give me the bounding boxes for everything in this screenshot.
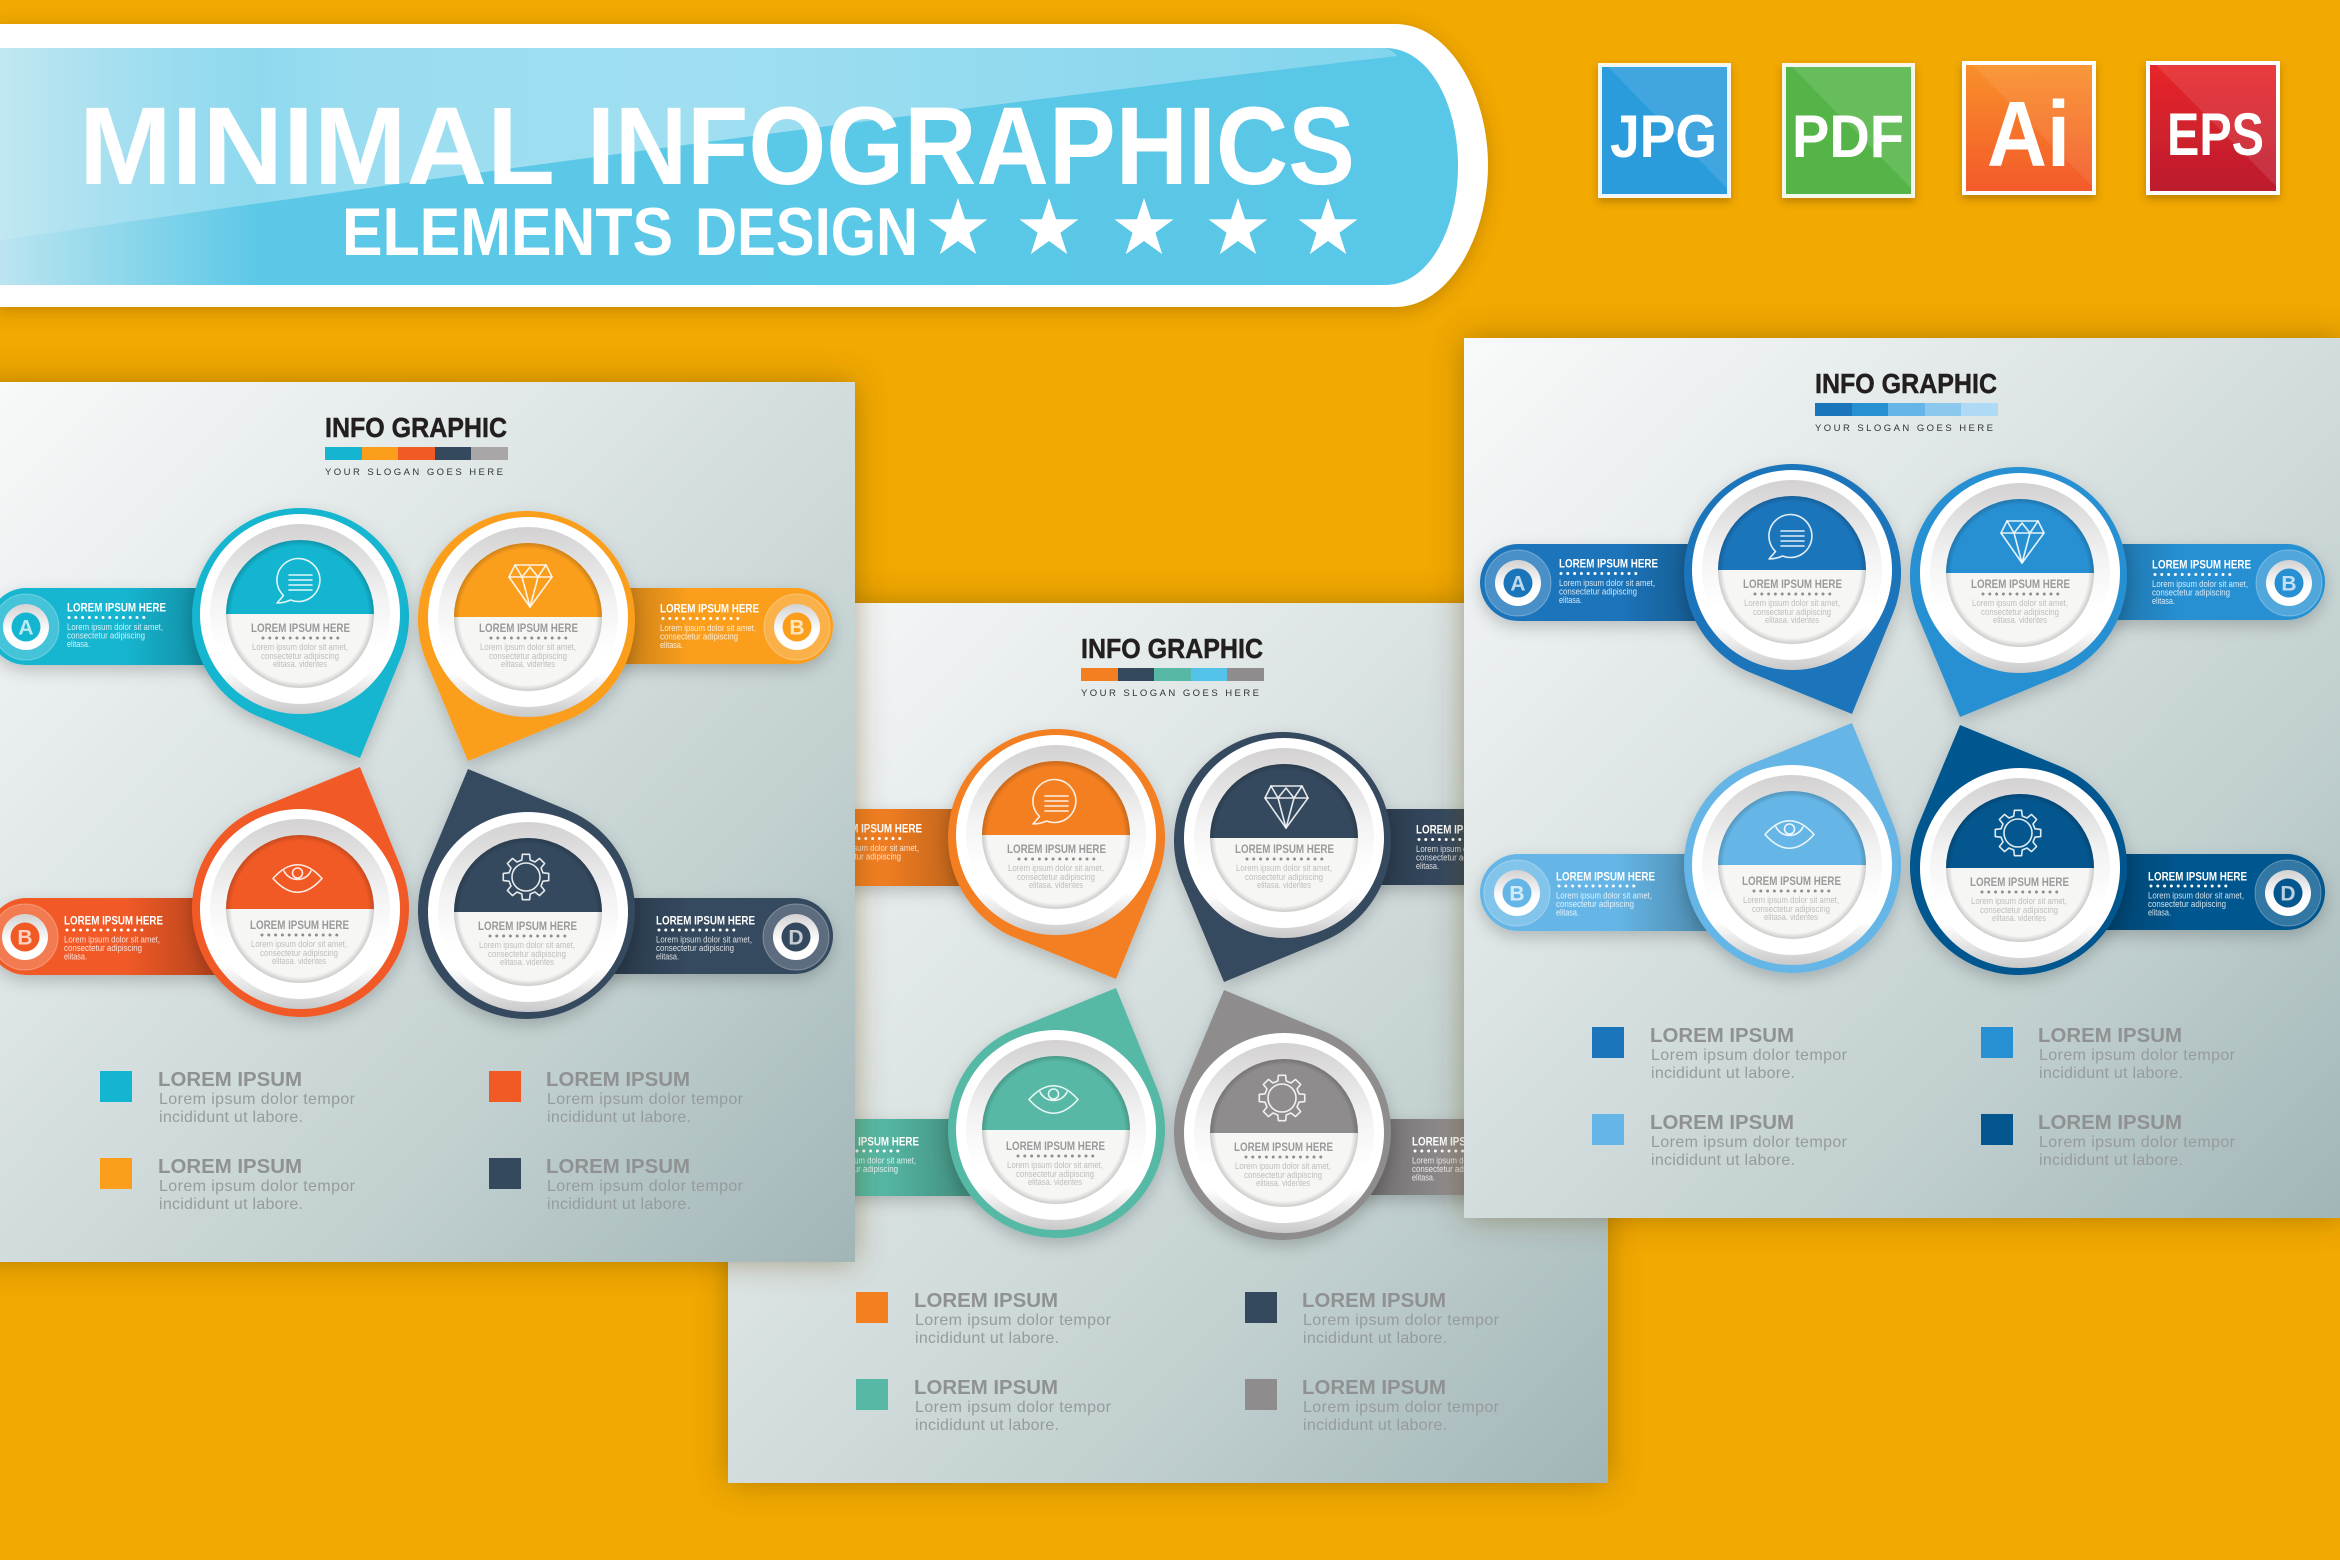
pin text: LOREM IPSUM HERE (251, 621, 350, 635)
pin (192, 508, 409, 758)
badge A (0, 594, 59, 660)
label bar: elitasa. (67, 639, 90, 649)
pin text (1006, 1139, 1105, 1187)
label bar: consectetur adipiscing (1416, 852, 1494, 862)
icon: Ai file badge (1964, 63, 2094, 193)
pin text: consectetur adipiscing (1753, 607, 1831, 617)
legend item: Lorem ipsum dolor tempor (2039, 1134, 2236, 1151)
icon: eye (273, 865, 322, 892)
badge B (2256, 550, 2322, 616)
node: bottom-right grey (1174, 990, 1589, 1240)
label bar: LOREM IPSUM HERE (67, 600, 166, 614)
label bar: LOREM IPSUM HERE (656, 914, 755, 928)
pin (1910, 467, 2127, 717)
label bar: LOREM IPSUM HERE (1556, 870, 1655, 884)
label bar: Lorem ipsum dolor sit amet, (64, 934, 160, 944)
subtitle: DESIGN (695, 194, 918, 270)
legend item: LOREM IPSUM (158, 1069, 302, 1091)
badge A (1485, 550, 1551, 616)
badge B: B (789, 616, 805, 640)
label bar: consectetur adipiscing (1556, 899, 1634, 909)
label bar (1284, 1119, 1589, 1195)
badge D (2255, 860, 2321, 926)
heading (1081, 633, 1264, 699)
heading: YOUR SLOGAN GOES HERE (325, 467, 503, 478)
icon: diamond (2001, 521, 2044, 563)
icon: speech bubble (277, 559, 320, 603)
subtitle (342, 194, 918, 270)
title banner (0, 24, 1488, 307)
panel: left infographic (0, 382, 855, 1262)
pin text: consectetur adipiscing (1244, 1170, 1322, 1180)
heading (325, 412, 508, 478)
label bar (528, 588, 833, 664)
node: bottom-right dark blue (1910, 725, 2325, 975)
pin text: Lorem ipsum dolor sit amet, (1235, 1161, 1331, 1171)
icon: JPG file badge: JPG (1610, 103, 1717, 170)
label bar: consectetur adipiscing (2148, 899, 2226, 909)
label bar: elitasa. (1556, 908, 1579, 918)
pin text: LOREM IPSUM HERE (1006, 1139, 1105, 1153)
label bar (0, 898, 300, 975)
pin text: consectetur adipiscing (1016, 1169, 1094, 1179)
badge B: B (17, 926, 33, 950)
pin text: elitasa. videntes (1257, 880, 1311, 890)
icon: gear (503, 854, 549, 900)
legend item: incididunt ut labore. (159, 1196, 303, 1213)
legend item: Lorem ipsum dolor tempor (547, 1178, 744, 1195)
badge D: D (2280, 882, 2296, 906)
icon: speech bubble (1033, 780, 1076, 824)
label bar: LOREM IPSUM HERE (2148, 870, 2247, 884)
pin text: LOREM IPSUM HERE (479, 621, 578, 635)
legend item: incididunt ut labore. (1651, 1065, 1795, 1082)
node: top-right navy (1174, 732, 1589, 982)
label bar: elitasa. (2148, 908, 2171, 918)
heading: YOUR SLOGAN GOES HERE (1815, 423, 1993, 434)
heading: INFO GRAPHIC (1815, 368, 1997, 399)
label bar: elitasa. (2152, 596, 2175, 606)
label bar: Lorem ipsum dolor sit amet, (1556, 890, 1652, 900)
label bar: LOREM IPSUM HERE (823, 822, 922, 836)
label bar (1480, 854, 1792, 931)
legend item: LOREM IPSUM (158, 1156, 302, 1178)
label bar: elitasa. (64, 952, 87, 962)
label bar: consectetur adipiscing (656, 943, 734, 953)
node: bottom-left light blue (1480, 723, 1901, 973)
label bar: elitasa. (820, 1172, 843, 1182)
pin text: consectetur adipiscing (260, 948, 338, 958)
icon: eye (1029, 1086, 1078, 1113)
legend item: incididunt ut labore. (915, 1417, 1059, 1434)
legend item: Lorem ipsum dolor tempor (547, 1091, 744, 1108)
icon: gear (1259, 1075, 1305, 1121)
pin text: Lorem ipsum dolor sit amet, (252, 642, 348, 652)
legend item: incididunt ut labore. (2039, 1065, 2183, 1082)
pin text: LOREM IPSUM HERE (1007, 842, 1106, 856)
label bar: Lorem ipsum dolor sit amet, (1559, 578, 1655, 588)
label bar: LOREM IPSUM HERE (660, 602, 759, 616)
pin (418, 511, 635, 761)
pin text: LOREM IPSUM HERE (1234, 1140, 1333, 1154)
legend item: Lorem ipsum dolor tempor (159, 1091, 356, 1108)
label bar: Lorem ipsum dolor sit amet, (823, 843, 919, 853)
legend item: incididunt ut labore. (2039, 1152, 2183, 1169)
heading: INFO GRAPHIC (1081, 633, 1263, 664)
main title (79, 85, 1355, 208)
pin text: consectetur adipiscing (1245, 872, 1323, 882)
legend item: Lorem ipsum dolor tempor (915, 1312, 1112, 1329)
node: top-left blue (1480, 464, 1901, 714)
pin text: elitasa. videntes (1992, 913, 2046, 923)
badge B (764, 594, 830, 660)
node: top-right orange (418, 511, 833, 761)
label bar: consectetur adipiscing (820, 1164, 898, 1174)
legend item: LOREM IPSUM (914, 1377, 1058, 1399)
label bar: elitasa. (1559, 595, 1582, 605)
pin text: LOREM IPSUM HERE (1743, 577, 1842, 591)
legend item: incididunt ut labore. (547, 1109, 691, 1126)
label bar: Lorem ipsum dolor sit amet, (660, 623, 756, 633)
pin (948, 729, 1165, 979)
main title: INFOGRAPHICS (587, 85, 1355, 208)
label bar: LOREM IPSUM HERE (64, 914, 163, 928)
badge B: B (1509, 882, 1525, 906)
legend item: Lorem ipsum dolor tempor (915, 1399, 1112, 1416)
legend item: Lorem ipsum dolor tempor (1303, 1399, 1500, 1416)
node: top-left orange (744, 729, 1165, 979)
pin text: consectetur adipiscing (1017, 872, 1095, 882)
panel: right infographic (1464, 338, 2340, 1218)
legend item (1981, 1112, 2236, 1169)
label bar: elitasa. (660, 640, 683, 650)
pin text (478, 919, 577, 967)
badge D: D (788, 926, 804, 950)
legend item: LOREM IPSUM (914, 1290, 1058, 1312)
label bar: elitasa. (656, 952, 679, 962)
panel: middle infographic (728, 603, 1608, 1483)
legend item: LOREM IPSUM (1302, 1377, 1446, 1399)
pin text: LOREM IPSUM HERE (1235, 842, 1334, 856)
legend item: incididunt ut labore. (547, 1196, 691, 1213)
label bar: Lorem ipsum dolor sit amet, (1412, 1156, 1508, 1166)
pin text: Lorem ipsum dolor sit amet, (251, 939, 347, 949)
legend item: incididunt ut labore. (915, 1330, 1059, 1347)
legend item: incididunt ut labore. (159, 1109, 303, 1126)
label bar: elitasa. (1412, 1172, 1435, 1182)
label bar (1480, 544, 1792, 621)
pin text: Lorem ipsum dolor sit amet, (1972, 598, 2068, 608)
pin text (1235, 842, 1334, 890)
badge B (1484, 860, 1550, 926)
icon: EPS file badge (2148, 63, 2278, 193)
icon: diamond (1265, 786, 1308, 828)
pin text: consectetur adipiscing (489, 651, 567, 661)
label bar: Lorem ipsum dolor sit amet, (1416, 844, 1512, 854)
label bar: LOREM IPSUM HERE (1559, 556, 1658, 570)
pin text: Lorem ipsum dolor sit amet, (1971, 896, 2067, 906)
label bar (744, 1119, 1056, 1196)
legend item: LOREM IPSUM (546, 1156, 690, 1178)
label bar: LOREM IPSUM HERE (1416, 822, 1515, 836)
label bar: consectetur adipiscing (1559, 586, 1637, 596)
node: bottom-left teal (744, 988, 1165, 1238)
pin text: consectetur adipiscing (488, 949, 566, 959)
label bar: consectetur adipiscing (2152, 588, 2230, 598)
legend item: incididunt ut labore. (1651, 1152, 1795, 1169)
icon: gear (1995, 810, 2041, 856)
legend item: LOREM IPSUM (1650, 1112, 1794, 1134)
pin text: LOREM IPSUM HERE (1971, 577, 2070, 591)
badge B (0, 904, 58, 970)
legend item: incididunt ut labore. (1303, 1417, 1447, 1434)
label bar (744, 809, 1056, 886)
icon: JPG file badge (1600, 65, 1729, 196)
legend item: LOREM IPSUM (1302, 1290, 1446, 1312)
pin text: elitasa. videntes (272, 956, 326, 966)
pin text: LOREM IPSUM HERE (1970, 875, 2069, 889)
badge D (763, 904, 829, 970)
pin (418, 769, 635, 1019)
pin text: elitasa. videntes (273, 659, 327, 669)
main title: MINIMAL (79, 85, 555, 208)
legend item: LOREM IPSUM (2038, 1025, 2182, 1047)
pin text: Lorem ipsum dolor sit amet, (479, 940, 575, 950)
icon: speech bubble (1769, 515, 1812, 559)
label bar (0, 588, 300, 665)
pin text: elitasa. videntes (1028, 1177, 1082, 1187)
label bar: consectetur adipiscing (1412, 1164, 1490, 1174)
label bar (1284, 809, 1589, 885)
pin text: consectetur adipiscing (1980, 905, 2058, 915)
pin (948, 988, 1165, 1238)
icon: diamond (509, 565, 552, 607)
pin text: Lorem ipsum dolor sit amet, (1743, 895, 1839, 905)
icon: eye (1765, 821, 1814, 848)
node: bottom-left red (0, 767, 409, 1017)
pin text: LOREM IPSUM HERE (250, 918, 349, 932)
pin (1174, 990, 1391, 1240)
node: top-right mid blue (1910, 467, 2325, 717)
label bar: elitasa. (1416, 861, 1439, 871)
pin text: LOREM IPSUM HERE (478, 919, 577, 933)
node: bottom-right navy (418, 769, 833, 1019)
legend item: Lorem ipsum dolor tempor (159, 1178, 356, 1195)
pin (1684, 723, 1901, 973)
label bar: LOREM IPSUM HERE (1412, 1134, 1511, 1148)
pin text: elitasa. videntes (1029, 880, 1083, 890)
pin text: elitasa. videntes (1764, 912, 1818, 922)
icon: EPS file badge: EPS (2167, 101, 2264, 168)
label bar: Lorem ipsum dolor sit amet, (2148, 890, 2244, 900)
pin text: elitasa. videntes (1993, 615, 2047, 625)
legend item (856, 1377, 1112, 1434)
pin text (1234, 1140, 1333, 1188)
legend item (1245, 1290, 1500, 1347)
legend item (489, 1156, 744, 1213)
rating stars (928, 198, 1358, 254)
legend item (1592, 1025, 1848, 1082)
icon: Ai file badge: Ai (1987, 82, 2070, 186)
heading: INFO GRAPHIC (325, 412, 507, 443)
label bar: elitasa. (823, 860, 846, 870)
pin text (1743, 577, 1842, 625)
legend item (1592, 1112, 1848, 1169)
pin text: elitasa. videntes (501, 659, 555, 669)
badge A: A (18, 616, 34, 640)
label bar: consectetur adipiscing (823, 852, 901, 862)
label bar (528, 898, 833, 974)
pin text: elitasa. videntes (1256, 1178, 1310, 1188)
icon: PDF file badge (1784, 65, 1913, 196)
badge A: A (1510, 572, 1526, 596)
label bar: consectetur adipiscing (660, 632, 738, 642)
pin (1174, 732, 1391, 982)
label bar (2020, 544, 2325, 620)
legend item (1245, 1377, 1500, 1434)
node: top-left cyan (0, 508, 409, 758)
heading: YOUR SLOGAN GOES HERE (1081, 688, 1259, 699)
legend item: Lorem ipsum dolor tempor (1303, 1312, 1500, 1329)
label bar (2020, 854, 2325, 930)
pin text (1970, 875, 2069, 923)
legend item: Lorem ipsum dolor tempor (1651, 1134, 1848, 1151)
pin text: Lorem ipsum dolor sit amet, (1744, 598, 1840, 608)
pin text: Lorem ipsum dolor sit amet, (480, 642, 576, 652)
legend item: LOREM IPSUM (546, 1069, 690, 1091)
label bar: consectetur adipiscing (67, 630, 145, 640)
pin text: consectetur adipiscing (261, 651, 339, 661)
pin text (1742, 874, 1841, 922)
label bar: Lorem ipsum dolor sit amet, (67, 622, 163, 632)
pin (1910, 725, 2127, 975)
pin text: Lorem ipsum dolor sit amet, (1236, 863, 1332, 873)
pin text (250, 918, 349, 966)
legend item: LOREM IPSUM (2038, 1112, 2182, 1134)
heading (1815, 368, 1998, 434)
legend (1592, 1025, 2236, 1169)
label bar: consectetur adipiscing (64, 943, 142, 953)
pin text: consectetur adipiscing (1981, 607, 2059, 617)
label bar: Lorem ipsum dolor sit amet, (2152, 579, 2248, 589)
label bar: Lorem ipsum dolor sit amet, (656, 934, 752, 944)
legend (100, 1069, 744, 1213)
legend item (1981, 1025, 2236, 1082)
label bar: LOREM IPSUM HERE (2152, 558, 2251, 572)
pin text: consectetur adipiscing (1752, 904, 1830, 914)
label bar: Lorem ipsum dolor sit amet, (820, 1156, 916, 1166)
pin text: elitasa. videntes (500, 957, 554, 967)
pin text (1971, 577, 2070, 625)
legend item: Lorem ipsum dolor tempor (1651, 1047, 1848, 1064)
pin text: Lorem ipsum dolor sit amet, (1008, 863, 1104, 873)
legend item (100, 1156, 356, 1213)
legend item (489, 1069, 744, 1126)
legend item: Lorem ipsum dolor tempor (2039, 1047, 2236, 1064)
legend item: LOREM IPSUM (1650, 1025, 1794, 1047)
subtitle: ELEMENTS (342, 194, 673, 270)
badge B: B (2281, 572, 2297, 596)
pin text: elitasa. videntes (1765, 615, 1819, 625)
label bar: LOREM IPSUM HERE (820, 1134, 919, 1148)
legend item (100, 1069, 356, 1126)
legend item: incididunt ut labore. (1303, 1330, 1447, 1347)
legend (856, 1290, 1500, 1434)
pin text: Lorem ipsum dolor sit amet, (1007, 1160, 1103, 1170)
pin text (251, 621, 350, 669)
pin (1684, 464, 1901, 714)
legend item (856, 1290, 1112, 1347)
pin text (479, 621, 578, 669)
pin text (1007, 842, 1106, 890)
pin text: LOREM IPSUM HERE (1742, 874, 1841, 888)
pin (192, 767, 409, 1017)
icon: PDF file badge: PDF (1792, 103, 1904, 170)
